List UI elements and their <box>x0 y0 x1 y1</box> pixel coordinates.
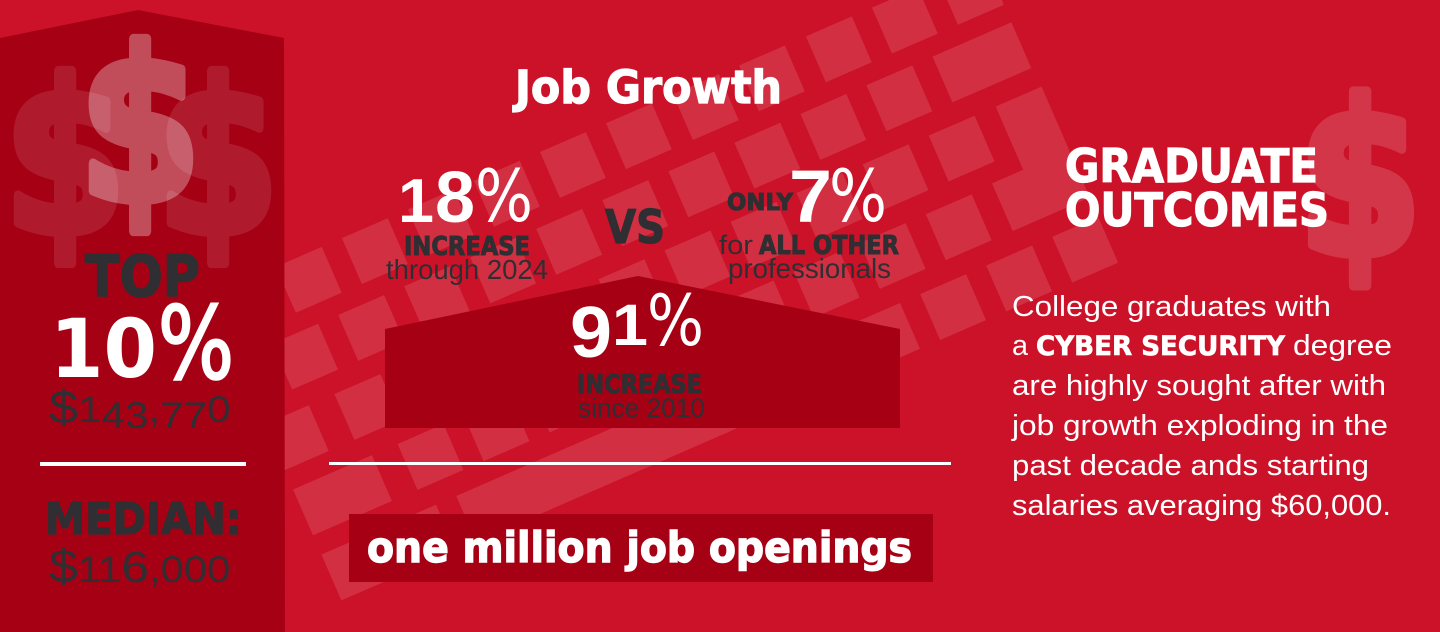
stat: only 7 percent: 7 <box>789 155 832 238</box>
panel: 91 percent increase: INCREASE <box>577 370 702 400</box>
stat: top 10 percent <box>50 285 234 402</box>
stat: top 10 percent: 10 <box>50 303 157 397</box>
value: median salary: $116,000 <box>49 542 230 592</box>
heading: graduate outcomes <box>1065 139 1329 237</box>
stat: 18 percent increase: INCREASE <box>404 232 530 262</box>
text block: graduate description: College graduates with <box>1012 291 1331 323</box>
vs label: VS <box>605 200 665 254</box>
stat: only 7 percent: professionals <box>728 253 891 284</box>
stat: top 10 percent: % <box>158 285 234 402</box>
panel: salaries <box>0 3 285 632</box>
text block: graduate description: degree <box>1293 330 1392 362</box>
stat: 18 percent increase: 8 <box>435 158 475 238</box>
stat: only 7 percent: ALL OTHER <box>759 231 899 261</box>
callout: one million job openings <box>349 514 933 582</box>
stat: only 7 percent <box>719 154 899 284</box>
panel shape <box>0 10 285 632</box>
label: top: TOP <box>85 244 200 310</box>
text block: graduate description: CYBER SECURITY <box>1036 331 1285 362</box>
value: top salary: $ <box>49 382 78 433</box>
text block: graduate description <box>1011 291 1392 522</box>
heading: graduate outcomes: OUTCOMES <box>1065 183 1329 237</box>
stat: 91 percent: 9 <box>570 293 612 373</box>
heading: graduate outcomes: GRADUATE <box>1065 139 1318 193</box>
text block: graduate description: job growth exploding in the <box>1011 410 1388 442</box>
heading: job growth: Job Growth <box>512 61 782 114</box>
stat: 91 percent <box>570 280 704 373</box>
text block: graduate description: are highly sought after with <box>1012 370 1386 402</box>
callout: one million job openings: one million job openings <box>367 523 912 572</box>
panel: 91 percent increase <box>385 276 900 428</box>
keyboard background <box>207 0 1118 601</box>
text block: graduate description: a <box>1012 330 1029 362</box>
stat: 91 percent: % <box>647 280 704 362</box>
stat: 18 percent increase <box>386 154 548 285</box>
divider <box>329 462 951 465</box>
stat: 18 percent increase: 1 <box>398 167 434 236</box>
stat: only 7 percent: % <box>829 154 887 238</box>
panel: 91 percent increase: since 2010 <box>578 393 705 423</box>
icon: three dollar signs <box>4 3 279 282</box>
value: top salary: 143,770 <box>78 389 231 436</box>
label: median: MEDIAN: <box>45 494 242 545</box>
divider <box>40 462 246 466</box>
icon: three dollar signs: $ <box>79 3 201 250</box>
stat: only 7 percent: ONLY <box>727 190 793 216</box>
text block: graduate description: salaries averaging $60,000. <box>1012 490 1391 522</box>
stat: 18 percent increase: through 2024 <box>386 254 548 285</box>
icon: three dollar signs: $ <box>157 35 279 282</box>
stat: 91 percent: 1 <box>612 293 648 358</box>
icon: three dollar signs: $ <box>4 35 126 282</box>
text block: graduate description: past decade ands starting <box>1012 450 1369 482</box>
stat: 18 percent increase: % <box>475 154 533 238</box>
stat: only 7 percent: for <box>719 230 753 260</box>
